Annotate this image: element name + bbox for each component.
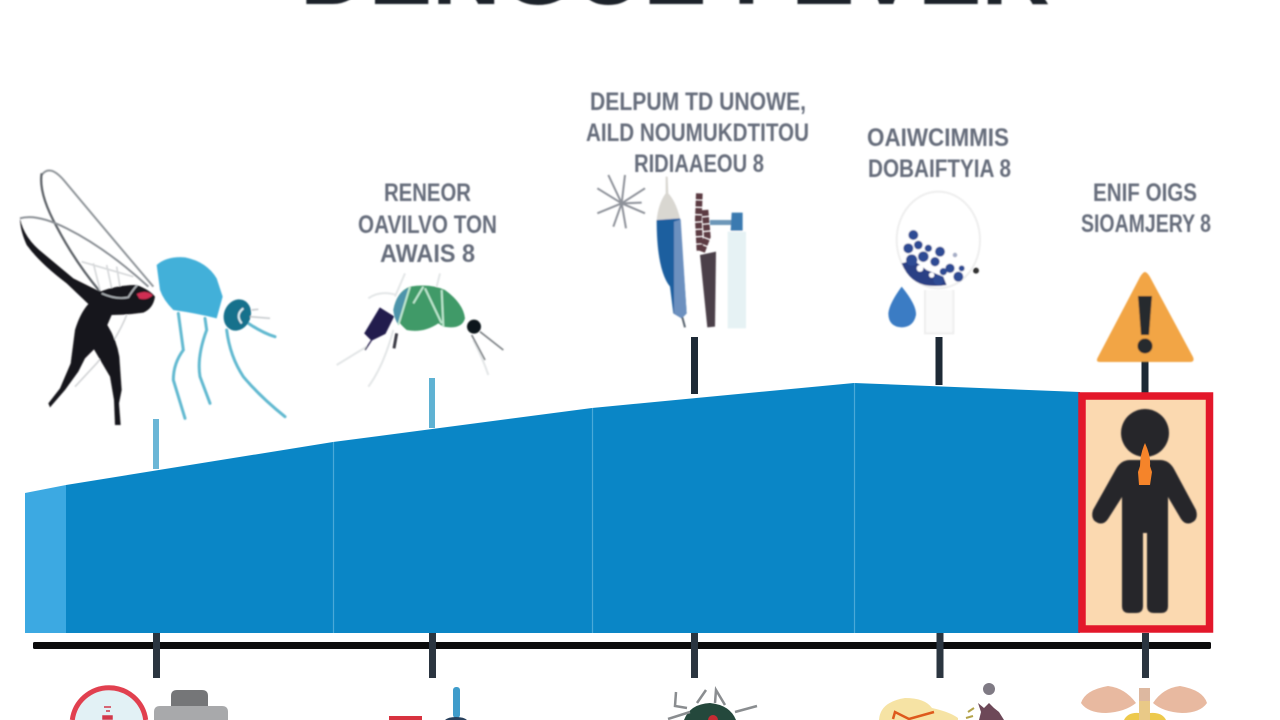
icon: flask with blood cells	[888, 192, 980, 333]
brown blade	[700, 252, 716, 327]
green body	[393, 286, 465, 331]
label: stage 3: DELPUM TD UNOWE,	[590, 88, 806, 116]
tick 2	[429, 633, 436, 678]
dark blue syringe barrel	[657, 218, 687, 318]
label: stage 2: OAVILVO TON	[358, 211, 497, 239]
stem: stage 1	[153, 419, 159, 469]
label: stage 2: AWAIS 8	[380, 240, 475, 268]
flask outline	[897, 192, 980, 288]
yellow lower organ	[1124, 713, 1166, 720]
proboscis	[472, 332, 503, 360]
icon: lungs	[1081, 686, 1207, 720]
label: stage 4: OAIWCIMMIS	[867, 124, 1009, 152]
label: stage 5: SIOAMJERY 8	[1081, 210, 1211, 238]
blue shoulder	[393, 287, 410, 325]
blood cell cluster	[902, 230, 979, 286]
icon: yellow organ with orange mark	[879, 698, 958, 720]
label: stage 5: ENIF OIGS	[1093, 179, 1197, 207]
stem: stage 2	[429, 378, 435, 428]
icon: syringe and medical tools	[597, 175, 746, 328]
bug legs	[668, 690, 757, 719]
pale body lines	[398, 287, 443, 327]
area chart: progression band	[25, 383, 1080, 633]
segment divider 3	[854, 383, 856, 633]
black abdomen and legs	[20, 218, 155, 425]
blue legs	[173, 313, 285, 418]
stem: stage 5	[1142, 360, 1148, 394]
blue thorax	[157, 257, 223, 318]
light left segment	[25, 485, 66, 633]
segment divider 1	[332, 442, 334, 633]
icon: red box	[389, 716, 422, 720]
label: stage 4	[867, 124, 1011, 183]
light blue barrel strip	[674, 219, 687, 318]
label: stage 5	[1081, 179, 1211, 238]
main blue area	[66, 383, 1080, 633]
label: stage 2	[358, 179, 497, 268]
teal head	[219, 295, 256, 335]
timeline axis	[33, 633, 1211, 678]
orange V	[893, 712, 934, 719]
trachea	[1139, 700, 1150, 720]
black head	[467, 320, 481, 334]
cell cluster	[978, 703, 1004, 720]
red spot	[708, 715, 718, 720]
badge ring	[72, 688, 146, 720]
blue drop	[888, 287, 916, 327]
icon: dark cells cluster	[966, 683, 1004, 720]
starburst	[597, 175, 645, 228]
flask neck	[925, 290, 953, 333]
label: stage 2: RENEOR	[384, 179, 471, 207]
person icon	[1092, 409, 1197, 613]
label: stage 4: DOBAIFTYIA 8	[868, 155, 1011, 183]
red blood mark	[137, 292, 153, 299]
exclamation dot	[1138, 338, 1152, 354]
orange flame at throat	[1138, 443, 1152, 485]
vial arm	[710, 220, 732, 225]
label: stage 3: RIDIAAEOU 8	[634, 150, 764, 178]
wings	[20, 170, 153, 387]
tick 1	[153, 633, 160, 678]
icon: dark green bug	[668, 690, 757, 720]
exclamation mark	[1138, 296, 1152, 335]
panel: severe patient box	[1082, 396, 1210, 629]
red marks	[103, 707, 112, 719]
vial tube	[728, 232, 746, 328]
dropper base	[445, 717, 467, 720]
yellow specks	[966, 708, 974, 718]
dark abdomen	[365, 308, 393, 350]
label: stage 3	[586, 88, 809, 178]
stem: stage 4	[936, 337, 942, 385]
stem: stage 3	[691, 337, 698, 394]
tip	[682, 317, 685, 327]
dark thin leg	[394, 333, 397, 348]
tick 4	[936, 633, 944, 678]
vial cap	[731, 213, 743, 231]
brown chain	[698, 193, 707, 252]
icon: red thermometer badge	[72, 688, 146, 720]
segment divider 2	[592, 408, 594, 633]
right lung	[1153, 686, 1207, 713]
icon: blue dropper	[445, 687, 467, 720]
pale wings and legs	[337, 273, 488, 387]
tick 3	[691, 633, 698, 678]
pale wing-root line	[102, 285, 137, 298]
trachea top	[1139, 688, 1150, 701]
icon: large mosquito	[20, 170, 285, 425]
needle and cap	[657, 177, 680, 220]
icon: warning triangle	[1097, 272, 1194, 362]
icon: gray bottle	[154, 690, 228, 720]
icon: green mosquito	[337, 273, 503, 387]
tick 5	[1142, 633, 1149, 678]
label: stage 3: AILD NOUMUKDTITOU	[586, 119, 809, 147]
bottle body	[154, 706, 228, 720]
